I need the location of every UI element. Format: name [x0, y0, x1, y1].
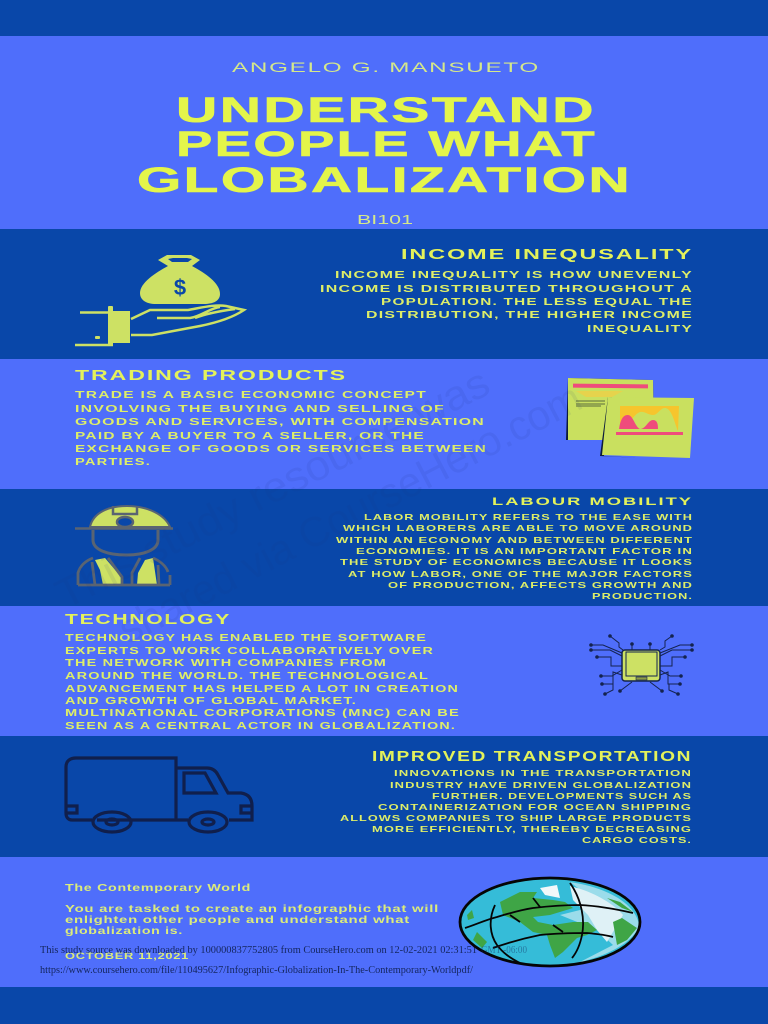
- text: labour mobility body: PRODUCTION.: [592, 592, 693, 601]
- text: date: OCTOBER 11,2021: [65, 951, 189, 961]
- course code: BI101: [357, 213, 413, 227]
- text: income inequality body: INEQUALITY: [587, 324, 693, 335]
- text: improved transportation body: INDUSTRY HAVE DRIVEN GLOBALIZATION: [390, 781, 692, 790]
- text: trading products body: PARTIES.: [75, 457, 151, 468]
- text: course name: The Contemporary World: [65, 883, 251, 894]
- icon: hand holding money bag: [75, 255, 244, 346]
- text: trading products body: PAID BY A BUYER TO A SELLER, OR THE: [75, 431, 425, 442]
- text: labour mobility body: THE STUDY OF ECONOMICS BECAUSE IT LOOKS: [340, 558, 693, 567]
- panel: improved transportation: [66, 749, 692, 845]
- text: income inequality body: [320, 270, 693, 335]
- panel: technology: [65, 612, 694, 732]
- text: technology body: THE NETWORK WITH COMPANIES FROM: [65, 658, 387, 669]
- icon: globe: [460, 878, 640, 966]
- text: technology body: MULTINATIONAL CORPORATIONS (MNC) CAN BE: [65, 708, 460, 719]
- icon: globe: GMT -06:00: [481, 945, 527, 956]
- text: trading products body: [75, 390, 487, 468]
- text: assignment description: enlighten other people and understand what: [65, 915, 410, 926]
- band: income inequality panel background: [0, 229, 768, 359]
- heading: improved transportation: IMPROVED TRANSPORTATION: [372, 749, 692, 765]
- text: trading products body: GOODS AND SERVICES, WITH COMPENSATION: [75, 417, 485, 428]
- heading: labour mobility: LABOUR MOBILITY: [492, 496, 693, 508]
- icon: hand holding money bag: $: [174, 275, 186, 300]
- text: improved transportation body: [340, 769, 692, 845]
- text: labour mobility body: LABOR MOBILITY REFERS TO THE EASE WITH: [364, 513, 693, 522]
- title: [137, 91, 632, 200]
- icon: sticky note charts: [566, 378, 694, 458]
- text: source url: https://www.coursehero.com/file/110495627/Infographic-Globalization-In-The-Contemporary-Worldpdf/: [40, 965, 473, 976]
- text: improved transportation body: INNOVATIONS IN THE TRANSPORTATION: [394, 769, 692, 778]
- text: improved transportation body: CARGO COSTS.: [582, 836, 692, 845]
- icon: circuit smartphone: [589, 634, 694, 696]
- text: technology body: AND GROWTH OF GLOBAL MARKET.: [65, 696, 357, 707]
- author name: ANGELO G. MANSUETO: [232, 59, 540, 75]
- text: improved transportation body: FURTHER. DEVELOPMENTS SUCH AS: [432, 792, 692, 801]
- icon: construction worker: [75, 506, 173, 585]
- text: labour mobility body: WHICH LABORERS ARE ABLE TO MOVE AROUND: [343, 524, 693, 533]
- title: UNDERSTAND: [176, 91, 596, 130]
- icon: delivery truck: [66, 758, 252, 832]
- text: technology body: AROUND THE WORLD. THE TECHNOLOGICAL: [65, 671, 429, 682]
- heading: technology: TECHNOLOGY: [65, 612, 231, 628]
- text: technology body: EXPERTS TO WORK COLLABORATIVELY OVER: [65, 646, 434, 657]
- panel: labour mobility: [75, 496, 693, 601]
- panel: income inequality: [75, 247, 693, 346]
- text: technology body: [65, 633, 460, 732]
- band: labour mobility panel background: [0, 489, 768, 606]
- text: trading products body: TRADE IS A BASIC ECONOMIC CONCEPT: [75, 390, 427, 401]
- heading: income inequality: INCOME INEQUSALITY: [401, 247, 693, 263]
- text: assignment description: You are tasked to create an infographic that will: [65, 904, 439, 915]
- text: income inequality body: DISTRIBUTION, THE HIGHER INCOME: [366, 310, 693, 321]
- text: income inequality body: POPULATION. THE LESS EQUAL THE: [381, 297, 693, 308]
- text: technology body: ADVANCEMENT HAS HELPED A LOT IN CREATION: [65, 684, 459, 695]
- text: labour mobility body: ECONOMIES. IT IS AN IMPORTANT FACTOR IN: [356, 547, 693, 556]
- band: improved transportation panel background: [0, 736, 768, 857]
- text: download notice: This study source was downloaded by 100000837752805 from CourseHero.com on 12-02-2021 02:31:51: [40, 945, 477, 956]
- text: improved transportation body: ALLOWS COMPANIES TO SHIP LARGE PRODUCTS: [340, 814, 692, 823]
- panel: contemporary world footer: [40, 878, 640, 976]
- watermark: This study resource was: [48, 358, 497, 618]
- text: technology body: TECHNOLOGY HAS ENABLED THE SOFTWARE: [65, 633, 427, 644]
- text: trading products body: INVOLVING THE BUYING AND SELLING OF: [75, 404, 445, 415]
- text: income inequality body: INCOME INEQUALITY IS HOW UNEVENLY: [335, 270, 693, 281]
- text: income inequality body: INCOME IS DISTRIBUTED THROUGHOUT A: [320, 284, 693, 295]
- band: top edge: [0, 0, 768, 36]
- title: PEOPLE WHAT: [176, 125, 597, 164]
- text: labour mobility body: [336, 513, 693, 601]
- panel: trading products: [75, 368, 694, 468]
- heading: trading products: TRADING PRODUCTS: [75, 368, 347, 384]
- watermark: shared via CourseHero.com: [110, 373, 589, 653]
- text: labour mobility body: OF PRODUCTION, AFFECTS GROWTH AND: [388, 581, 693, 590]
- band: bottom edge: [0, 987, 768, 1024]
- text: assignment description: [65, 904, 439, 937]
- text: labour mobility body: AT HOW LABOR, ONE OF THE MAJOR FACTORS: [348, 570, 693, 579]
- text: technology body: SEEN AS A CENTRAL ACTOR IN GLOBALIZATION.: [65, 721, 456, 732]
- text: improved transportation body: MORE EFFICIENTLY, THEREBY DECREASING: [372, 825, 692, 834]
- text: assignment description: globalization is.: [65, 926, 183, 937]
- text: trading products body: EXCHANGE OF GOODS OR SERVICES BETWEEN: [75, 444, 487, 455]
- text: improved transportation body: CONTAINERIZATION FOR OCEAN SHIPPING: [378, 803, 692, 812]
- text: labour mobility body: WITHIN AN ECONOMY AND BETWEEN DIFFERENT: [336, 536, 693, 545]
- title: GLOBALIZATION: [137, 161, 632, 200]
